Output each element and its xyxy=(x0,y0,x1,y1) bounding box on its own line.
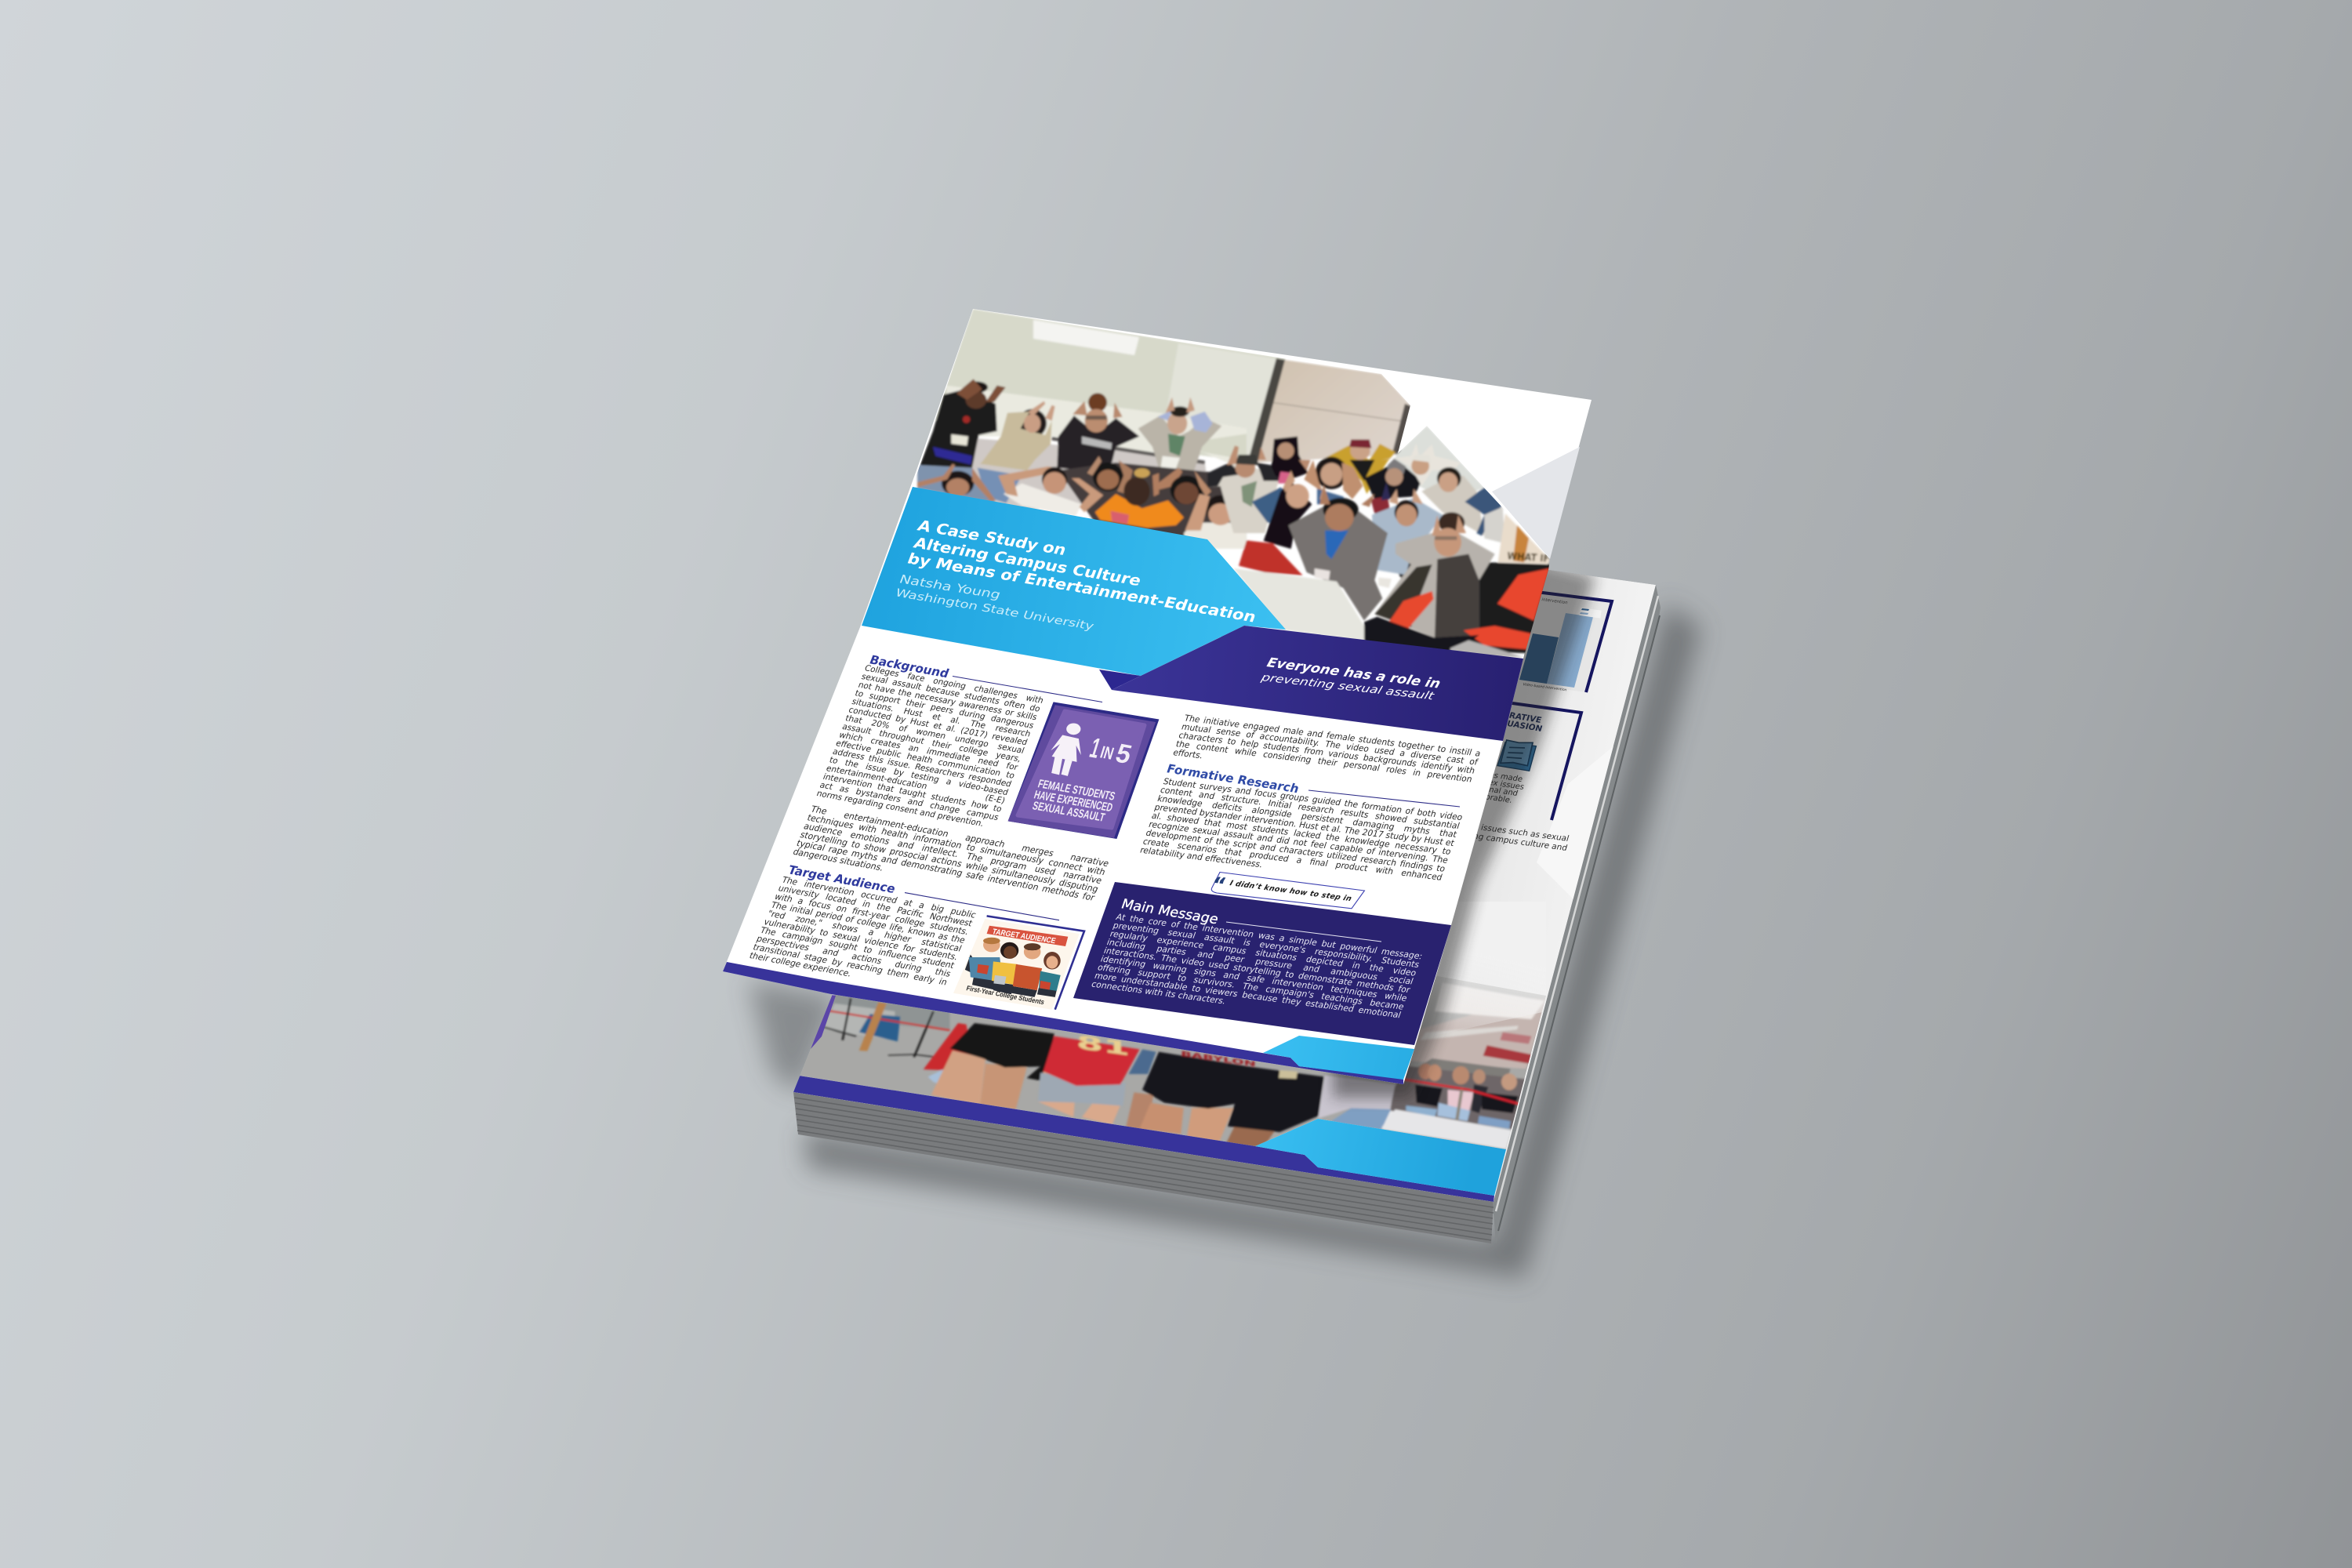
stat box: 1 in 5 xyxy=(1008,702,1159,839)
text: formative research: Student surveys and focus groups guided the formation of both video xyxy=(1162,777,1464,822)
text: target audience: with a focus on first-year college students. xyxy=(773,892,971,937)
hero blue panel xyxy=(862,487,1286,676)
text: main message: At the core of the intervention was a simple but powerful message: xyxy=(1115,912,1424,961)
text: target audience: their college experience. xyxy=(748,951,853,979)
header photo xyxy=(902,309,1552,657)
lower sheet xyxy=(793,570,1656,1202)
page paper xyxy=(723,309,1592,1084)
heading: formative research xyxy=(1165,762,1460,807)
top sheet xyxy=(723,309,1592,1084)
purple sliver xyxy=(811,994,836,1049)
banner tagline: preventing sexual assault xyxy=(1259,671,1436,702)
illustration: four students xyxy=(965,938,1061,997)
text: background paragraph 1: Colleges face ongoing challenges with xyxy=(863,663,1045,706)
stat box: 1 in 5: HAVE EXPERIENCED xyxy=(1033,788,1114,815)
lower sheet body text: and other issues such as sexual xyxy=(1438,818,1570,844)
footer blue shape xyxy=(1263,1036,1414,1080)
text: background paragraph 1: to the issue by testing a video-based xyxy=(828,755,1010,797)
heading: background: Background xyxy=(868,653,951,681)
text: background paragraph 1: entertainment-education (E-E) xyxy=(825,764,1007,806)
text: main message: offering support to survivors. The campaign's teachings became xyxy=(1096,962,1406,1012)
text: background paragraph 1: sexual assault because students often do xyxy=(860,672,1042,714)
mockup scene xyxy=(723,309,1711,1288)
text: formative research: knowledge deficits alongside persistent damaging myths that xyxy=(1156,794,1458,840)
text: background paragraph 1: intervention that taught students how to xyxy=(822,772,1004,814)
text: background paragraph 1: which creates an immediate need for xyxy=(837,731,1019,772)
quote callout: I didn’t know how to step in xyxy=(1229,879,1353,903)
poster in photo xyxy=(1498,514,1550,564)
shadow under the stack xyxy=(749,604,1701,1278)
text: formative research: al. showed that most students lacked the knowledge necessary to xyxy=(1150,811,1452,857)
poster in photo: WHAT IF xyxy=(1507,550,1550,564)
paper stack edges xyxy=(793,585,1661,1244)
shadow cast by top sheet xyxy=(1333,549,1595,1098)
hero title xyxy=(905,517,1259,626)
text: background paragraph 1: effective public health communication to xyxy=(834,739,1016,781)
people legs and ground: 81 xyxy=(1076,1032,1130,1060)
lower sheet narrative persuasion card: NARRATIVE xyxy=(1489,708,1543,725)
hero title: A Case Study on xyxy=(915,517,1069,559)
lower sheet narrative persuasion card: PERSUASION xyxy=(1483,715,1544,734)
people legs and ground: BABYLON xyxy=(1181,1050,1256,1069)
text: main message: interactions. The video used storytelling to demonstrate methods for xyxy=(1102,946,1412,995)
text: target audience: The campaign sought to influence student xyxy=(759,926,956,971)
text: background paragraph 2: typical rape myths and demonstrating safe intervention methods for xyxy=(795,838,1097,903)
hero navy banner xyxy=(1112,626,1523,741)
text: background paragraph 1: norms regarding consent and prevention. xyxy=(815,789,985,829)
text: target audience: vulnerability to sexual violence for students. xyxy=(762,917,960,962)
fold shadow xyxy=(1099,670,1141,690)
quote callout xyxy=(1208,872,1364,909)
hero title: by Means of Entertainment-Education xyxy=(905,550,1259,626)
target audience card: First-Year College Students xyxy=(965,984,1045,1006)
crowd right half xyxy=(1207,437,1552,657)
lower sheet bar chart: intervention xyxy=(1541,597,1568,605)
stat box: 1 in 5: FEMALE STUDENTS xyxy=(1036,777,1116,804)
text: formative research: content and structure. Initial research results showed substantial xyxy=(1159,786,1461,831)
text: background paragraph 1: situations. Hust et al. The research xyxy=(851,697,1032,739)
lower sheet narrative persuasion card: Stories made xyxy=(1470,768,1523,784)
banner tagline xyxy=(1259,655,1443,702)
crowd left half xyxy=(917,379,1247,549)
crowd behind rope xyxy=(1380,982,1547,1149)
text: background paragraph 2: techniques with health information to simultaneously connect with xyxy=(806,812,1107,877)
text: background paragraph 2: storytelling to show prosocial actions while simultaneously disputing xyxy=(798,829,1100,895)
icon: female figure xyxy=(1051,723,1081,776)
text: background paragraph 2: dangerous situations. xyxy=(791,847,885,873)
author and affiliation: Washington State University xyxy=(894,587,1095,633)
text: formative research: prevented bystander intervention. Hust et al. The 2017 study by Hust et xyxy=(1153,803,1455,848)
lower sheet photo xyxy=(799,902,1547,1149)
text: background paragraph 1: assault throughout their college years, xyxy=(840,722,1022,764)
text: formative research: create scenarios that produced a final product with enhanced xyxy=(1142,837,1443,883)
text: initiative intro: the content while considering their personal roles in prevention xyxy=(1174,739,1473,785)
target audience card xyxy=(953,916,1084,1010)
text: main message: preventing sexual assault is everyone's responsibility. Students xyxy=(1112,920,1421,970)
text: target audience: university located in the Pacific Northwest xyxy=(777,884,974,928)
footer band xyxy=(723,962,1403,1084)
text: background paragraph 1: not have the necessary awareness or skills xyxy=(857,681,1039,722)
target audience card: TARGET AUDIENCE xyxy=(991,927,1057,946)
lower sheet narrative persuasion card: memorable. xyxy=(1465,790,1513,805)
text: formative research: development of the script and characters utilized research findings to xyxy=(1145,829,1446,874)
text: target audience: perspectives and actions during this xyxy=(755,935,953,979)
text: main message: regularly experience campus situations depicted in the video xyxy=(1109,928,1417,978)
lower sheet narrative persuasion card xyxy=(1486,702,1584,820)
text: initiative intro: The initiative engaged male and female students together to instill a xyxy=(1183,713,1482,759)
text: background paragraph 1: act as bystanders and change campus xyxy=(818,780,1000,822)
text: initiative intro: characters to help students from various backgrounds identify with xyxy=(1178,731,1476,776)
text: initiative intro: mutual sense of accountability. The video used a diverse cast of xyxy=(1180,722,1479,768)
text: initiative intro: efforts. xyxy=(1172,748,1204,760)
heading: target audience: Target Audience xyxy=(786,863,898,896)
text: background paragraph 2 xyxy=(791,804,1111,903)
lower sheet footer band xyxy=(793,1076,1494,1202)
text: main message: more understandable to viewers because they established emotional xyxy=(1093,971,1403,1020)
author and affiliation xyxy=(894,572,1095,633)
lower sheet body text xyxy=(1476,823,1570,851)
stat box: 1 in 5: 5 xyxy=(1112,739,1135,770)
stat box: 1 in 5: IN xyxy=(1098,742,1116,764)
lower sheet narrative persuasion card: complex issues xyxy=(1464,775,1525,792)
heading: background xyxy=(868,653,1102,702)
banner tagline: Everyone has a role in xyxy=(1265,655,1443,691)
hero title: Altering Campus Culture xyxy=(911,534,1144,590)
icon: open book xyxy=(1497,740,1536,771)
heading: formative research: Formative Research xyxy=(1165,762,1301,796)
stat box: 1 in 5: 1 xyxy=(1087,731,1105,764)
text: target audience: The intervention occurred at a big public xyxy=(780,875,978,920)
heading: main message xyxy=(1119,897,1381,942)
text: target audience: The initial period of college life, known as the xyxy=(769,901,967,946)
lower sheet bar chart: Video-based Intervention xyxy=(1522,682,1567,692)
pale triangle xyxy=(1492,447,1580,559)
heading: target audience xyxy=(786,863,1059,920)
text: background paragraph 1 xyxy=(815,663,1045,829)
lower sheet blue footer shape xyxy=(1255,1119,1506,1196)
author and affiliation: Natsha Young xyxy=(898,572,1003,602)
text: initiative intro xyxy=(1172,713,1482,785)
text: background paragraph 2: audience emotions and intellect. The program used narrative xyxy=(802,821,1104,886)
text: background paragraph 1: conducted by Hust et al. (2017) revealed xyxy=(848,706,1029,747)
people legs and ground xyxy=(823,993,1512,1149)
lower sheet body text: changing campus culture and xyxy=(1445,828,1569,853)
lower sheet narrative persuasion card: personal and xyxy=(1466,782,1519,798)
text: formative research xyxy=(1138,777,1464,883)
lower sheet bar chart xyxy=(1519,591,1613,693)
main message panel xyxy=(1073,882,1451,1045)
text: formative research: relatability and effectiveness. xyxy=(1138,845,1264,869)
text: main message xyxy=(1090,912,1424,1020)
text: main message: connections with its characters. xyxy=(1090,979,1228,1006)
text: background paragraph 1: address this issue. Researchers responded xyxy=(831,747,1013,789)
text: background paragraph 1: to support their peers during dangerous xyxy=(854,688,1035,731)
quote callout: “ xyxy=(1208,873,1229,898)
text: target audience: "red zone," shows a higher statistical xyxy=(766,909,963,954)
heading: main message: Main Message xyxy=(1119,897,1221,927)
text: main message: identifying warning signs and safe intervention techniques while xyxy=(1099,954,1409,1004)
lower sheet body text: video pre-testing xyxy=(1417,931,1489,949)
text: background paragraph 1: that 20% of women undergo sexual xyxy=(844,713,1025,756)
text: target audience xyxy=(748,875,978,988)
text: target audience: transitional stage by reaching them early in xyxy=(751,942,949,988)
text: formative research: recognize sexual assault and did not feel capable of intervening. The xyxy=(1147,820,1450,866)
stat box: 1 in 5: SEXUAL ASSAULT xyxy=(1031,799,1107,825)
text: main message: including parties and peer pressure and ambiguous social xyxy=(1105,937,1415,986)
text: background paragraph 2: The entertainment-education approach merges narrative xyxy=(809,804,1111,869)
